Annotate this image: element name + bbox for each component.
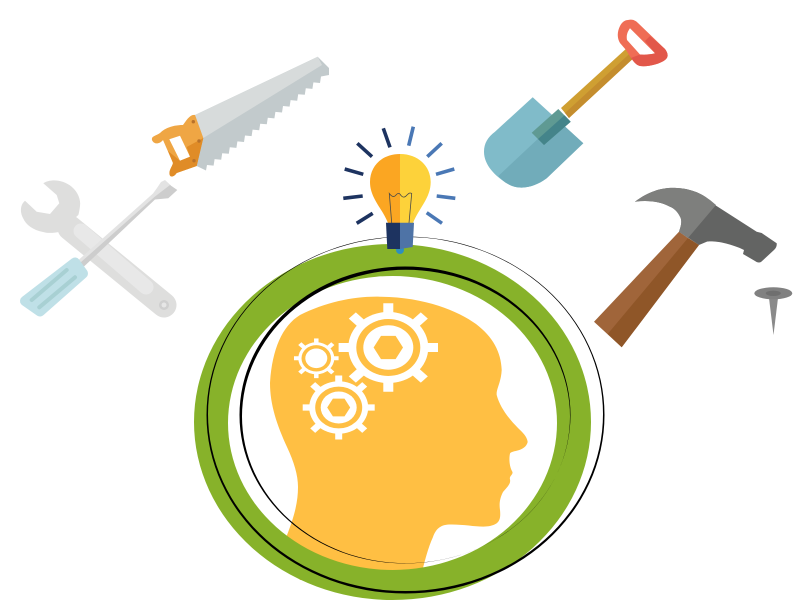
bulb glass right	[400, 154, 431, 223]
shovel grip	[618, 20, 668, 66]
saw blade upper	[195, 57, 322, 138]
head silhouette with gears	[270, 297, 528, 580]
icon: nail	[754, 287, 792, 335]
icon: hammer	[594, 188, 777, 347]
screwdriver handle	[25, 262, 83, 312]
gear: small	[294, 338, 339, 378]
nail head	[754, 287, 792, 299]
icon: light bulb	[343, 127, 455, 254]
wrench handle	[70, 228, 164, 305]
bulb rays right	[409, 127, 455, 223]
nail shaft	[769, 298, 778, 335]
hammer claw highlight	[635, 188, 716, 238]
bulb glass left	[370, 154, 400, 223]
shovel shaft shade	[565, 51, 637, 118]
bulb base right	[400, 223, 414, 249]
saw handle	[152, 115, 203, 177]
saw rivets	[192, 120, 201, 162]
filament	[389, 193, 412, 223]
shovel shaft	[561, 47, 637, 118]
saw blade lower	[195, 57, 329, 171]
shovel collar	[532, 109, 571, 145]
shovel blade	[484, 97, 583, 188]
icon: saw	[152, 57, 329, 177]
bulb base left	[386, 223, 400, 249]
gear: medium	[303, 375, 375, 440]
hammer head	[635, 188, 777, 263]
icon: shovel	[484, 20, 668, 188]
nail head center	[766, 291, 781, 296]
head	[270, 297, 528, 580]
shovel grip shade	[631, 36, 668, 66]
gear: large	[339, 303, 438, 392]
shovel collar shade	[538, 115, 571, 145]
outer black line	[206, 236, 604, 594]
bulb rays left	[343, 128, 390, 223]
inner black line	[240, 266, 570, 564]
wrench hole	[159, 300, 169, 310]
screwdriver grooves	[32, 270, 75, 307]
wrench highlight	[81, 231, 146, 287]
wrench head	[21, 180, 80, 233]
saw handle shade	[168, 138, 203, 177]
icon: wrench	[21, 180, 169, 310]
hammer handle	[594, 232, 699, 347]
screwdriver shaft shade	[80, 185, 177, 266]
icon: screwdriver	[25, 180, 177, 312]
green ring	[194, 244, 591, 600]
shovel blade shade	[498, 120, 583, 188]
bulb tip	[396, 246, 404, 254]
hammer handle shade	[608, 238, 699, 347]
screwdriver shaft	[78, 180, 171, 266]
